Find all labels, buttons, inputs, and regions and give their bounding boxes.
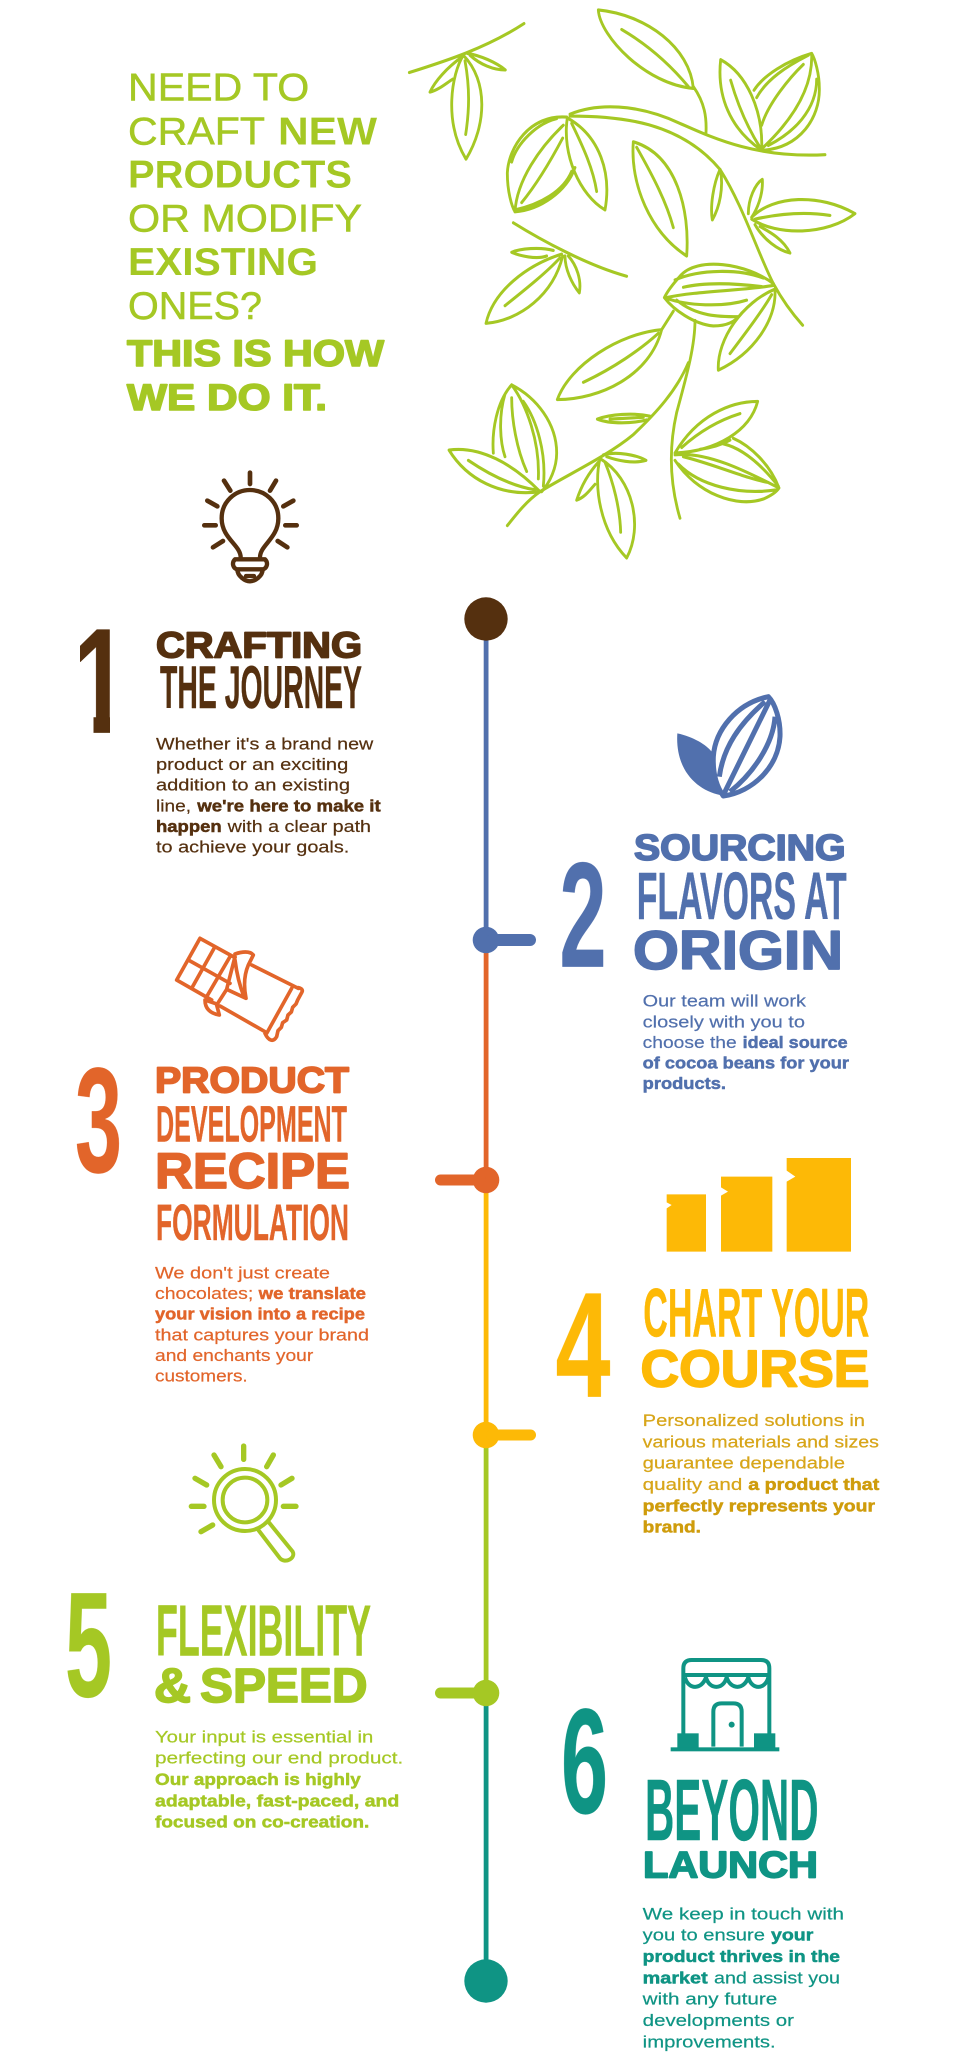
body text: product or an exciting <box>156 755 348 774</box>
illustration: cocoa leaves and branches <box>409 10 855 558</box>
body text: and assist you <box>714 1968 840 1987</box>
title: need to craft new products: WE DO IT. <box>127 376 327 418</box>
body text: brand. <box>643 1517 701 1536</box>
body text: Whether it's a brand new <box>156 734 374 753</box>
icon: chocolate bar <box>177 938 302 1040</box>
number 4: 4 <box>556 1261 610 1429</box>
panel: step 6 beyond launch <box>561 1660 844 2051</box>
body text: products. <box>643 1074 726 1093</box>
body text: you to ensure <box>643 1926 765 1945</box>
body text: and enchants your <box>155 1346 314 1365</box>
body text: chocolates; <box>155 1284 253 1303</box>
panel: step 5 flexibility and speed: FLEXIBILITY <box>156 1592 371 1672</box>
icon: cocoa bean with leaf <box>677 697 780 796</box>
heading <box>633 827 847 981</box>
node 5 connector <box>435 1680 499 1706</box>
title: need to craft new products: THIS IS HOW <box>127 332 385 374</box>
body text: happen <box>156 817 222 836</box>
body text: Your input is essential in <box>155 1727 373 1746</box>
number 2: 2 <box>560 831 606 999</box>
timeline end node <box>464 1959 508 2003</box>
icon: three rising pouches <box>667 1158 851 1252</box>
body text: a product that <box>748 1475 880 1494</box>
heading <box>640 1274 870 1398</box>
node 4 connector <box>473 1422 536 1448</box>
body text: We don't just create <box>155 1263 330 1282</box>
heading: LAUNCH <box>643 1844 818 1886</box>
icon: light bulb <box>204 473 297 581</box>
icon: magnifying glass with rays <box>191 1446 296 1561</box>
heading: PRODUCT <box>155 1059 349 1100</box>
body text: line, <box>156 796 191 815</box>
timeline <box>435 597 536 2003</box>
body text: that captures your brand <box>155 1325 369 1344</box>
heading: ORIGIN <box>633 920 843 981</box>
panel: step 1 crafting the journey: THE JOURNEY <box>160 654 362 721</box>
heading <box>156 624 362 721</box>
body text: various materials and sizes <box>643 1432 879 1451</box>
body text <box>155 1727 403 1832</box>
node 2 connector <box>473 927 536 953</box>
body text: product thrives in the <box>643 1947 840 1966</box>
body text <box>643 992 849 1093</box>
body text: focused on co-creation. <box>155 1813 369 1832</box>
body text <box>643 1411 880 1536</box>
panel: step 5 flexibility and speed <box>65 1446 403 1832</box>
body text: perfecting our end product. <box>155 1749 403 1768</box>
panel: step 3 product development recipe formulation <box>75 938 369 1386</box>
body text: customers. <box>155 1367 248 1386</box>
body text: perfectly represents your <box>643 1496 875 1515</box>
body text: with a clear path <box>227 817 371 836</box>
body text: improvements. <box>643 2032 776 2051</box>
heading: RECIPE <box>155 1143 350 1199</box>
body text: Our team will work <box>643 992 807 1011</box>
body text <box>156 734 381 857</box>
body text: your <box>771 1926 814 1945</box>
heading: & <box>154 1659 191 1713</box>
panel: step 4 chart your course <box>556 1158 880 1536</box>
body text <box>155 1263 369 1386</box>
number 1: 1 <box>73 597 128 765</box>
panel: step 3 product development recipe formulation: DEVELOPMENT <box>156 1096 347 1152</box>
body text: to achieve your goals. <box>156 838 349 857</box>
heading: SPEED <box>200 1659 368 1713</box>
body text: adaptable, fast-paced, and <box>155 1791 399 1810</box>
heading <box>643 1762 818 1886</box>
body text: ideal source <box>743 1033 848 1052</box>
body text: developments or <box>643 2011 794 2030</box>
body text: addition to an existing <box>156 776 350 795</box>
title: need to craft new products: NEED TO <box>128 67 309 110</box>
heading: SOURCING <box>634 827 846 868</box>
title: need to craft new products: CRAFT <box>128 110 265 153</box>
heading: COURSE <box>640 1340 870 1398</box>
body text: quality and <box>643 1475 742 1494</box>
heading <box>154 1592 371 1713</box>
title: need to craft new products: OR MODIFY <box>128 197 362 240</box>
title: need to craft new products: PRODUCTS <box>128 154 352 197</box>
number 6: 6 <box>561 1677 608 1845</box>
heading: CRAFTING <box>156 624 362 665</box>
body text: Personalized solutions in <box>643 1411 865 1430</box>
heading <box>155 1059 350 1251</box>
body text: closely with you to <box>643 1012 805 1031</box>
number 5: 5 <box>65 1560 112 1728</box>
body text: with any future <box>641 1990 777 2009</box>
title: need to craft new products: EXISTING <box>128 241 318 284</box>
body text: your vision into a recipe <box>155 1305 365 1324</box>
body text: we're here to make it <box>196 796 381 815</box>
title: need to craft new products: ONES? <box>128 285 262 328</box>
body text: We keep in touch with <box>643 1904 844 1923</box>
timeline start node <box>464 597 508 641</box>
body text: market <box>643 1968 708 1987</box>
title: need to craft new products: NEW <box>278 110 377 153</box>
body text: we translate <box>258 1284 366 1303</box>
body text: choose the <box>643 1033 737 1052</box>
body text <box>641 1904 844 2051</box>
panel: step 1 crafting the journey <box>80 629 381 856</box>
body text: Our approach is highly <box>155 1770 361 1789</box>
body text: of cocoa beans for your <box>643 1054 849 1073</box>
body text: guarantee dependable <box>643 1454 845 1473</box>
panel: step 2 sourcing flavors at origin <box>560 697 849 1093</box>
title: need to craft new products <box>127 67 385 418</box>
heading: FORMULATION <box>156 1194 349 1251</box>
icon: storefront <box>671 1660 779 1751</box>
node 3 connector <box>435 1167 499 1193</box>
number 3: 3 <box>75 1036 122 1204</box>
